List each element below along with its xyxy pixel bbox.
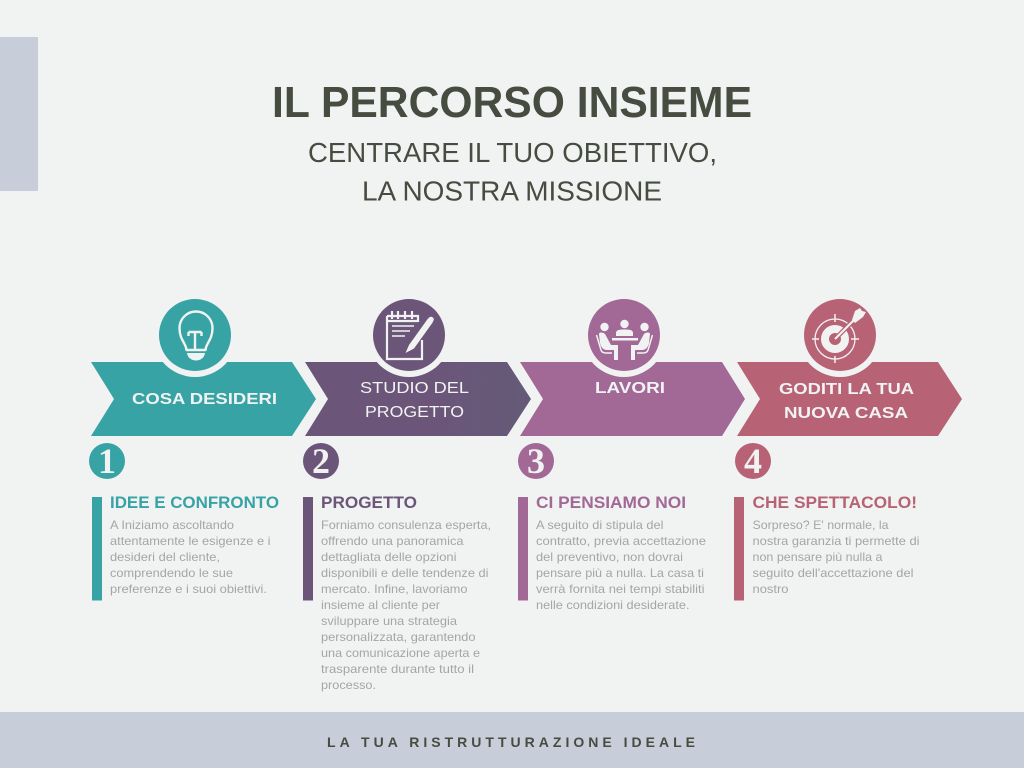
panel: ci pensiamo noi: pensare più a nulla. La casa ti (536, 566, 704, 580)
step 3 chevron: LAVORI (595, 380, 665, 397)
panel: che spettacolo (734, 494, 920, 600)
panel: progetto: una comunicazione aperta e (321, 646, 480, 660)
number badge 3 (518, 441, 554, 481)
panel: ci pensiamo noi: CI PENSIAMO NOI (536, 494, 686, 512)
step 4 chevron: NUOVA CASA (784, 405, 908, 422)
icon: notepad and pencil (367, 293, 451, 377)
icon: target with arrow (798, 293, 882, 377)
panel: ci pensiamo noi: nelle condizioni desiderate. (536, 598, 690, 612)
panel: idee e confronto: A Iniziamo ascoltando (110, 518, 234, 532)
subtitle (308, 137, 717, 206)
panel: idee e confronto: attentamente le esigenze e i (110, 534, 270, 548)
panel: progetto: PROGETTO (321, 494, 417, 512)
step 2 chevron: PROGETTO (365, 404, 464, 421)
subtitle: CENTRARE IL TUO OBIETTIVO, (308, 137, 717, 168)
panel: progetto (303, 494, 491, 692)
panel: ci pensiamo noi: del preventivo, non dovrai (536, 550, 683, 564)
step 1 chevron: COSA DESIDERI (132, 391, 277, 408)
icon: light bulb (153, 293, 237, 377)
panel: progetto: offrendo una panoramica (321, 534, 464, 548)
step 4 chevron (737, 362, 962, 436)
panel: che spettacolo: nostra garanzia ti permette di (752, 534, 920, 548)
panel: che spettacolo: CHE SPETTACOLO! (752, 494, 917, 512)
panel: progetto: processo. (321, 678, 376, 692)
number badge 4 (735, 441, 771, 481)
step 2 chevron (305, 362, 531, 436)
title: IL PERCORSO INSIEME (272, 78, 752, 127)
number badge 2 (303, 441, 339, 481)
number badge 1: 1 (98, 441, 116, 481)
panel: progetto: insieme al cliente per (321, 598, 440, 612)
decorative side block (0, 37, 38, 191)
panel: ci pensiamo noi: contratto, previa accettazione (536, 534, 706, 548)
icon: people at a table (582, 293, 666, 377)
footer band: LA TUA RISTRUTTURAZIONE IDEALE (327, 734, 695, 750)
panel: idee e confronto: IDEE E CONFRONTO (110, 494, 279, 512)
step 3 chevron (520, 362, 745, 436)
panel: ci pensiamo noi (518, 494, 706, 612)
panel: che spettacolo: seguito dell'accettazione del (752, 566, 914, 580)
panel: progetto: mercato. Infine, lavoriamo (321, 582, 468, 596)
number badge 2: 2 (312, 441, 330, 481)
panel: ci pensiamo noi: verrà fornita nei tempi stabiliti (536, 582, 704, 596)
number badge 3: 3 (527, 441, 545, 481)
panel: che spettacolo: nostro (752, 582, 789, 596)
panel: progetto: disponibili e delle tendenze di (321, 566, 488, 580)
panel: progetto: personalizzata, garantendo (321, 630, 476, 644)
panel: che spettacolo: non pensare più nulla a (752, 550, 883, 564)
step 1 chevron (91, 362, 316, 436)
panel: ci pensiamo noi: A seguito di stipula del (536, 518, 664, 532)
panel: progetto: dettagliata delle opzioni (321, 550, 456, 564)
step 4 chevron: GODITI LA TUA (779, 381, 914, 398)
panel: idee e confronto: preferenze e i suoi obiettivi. (110, 582, 267, 596)
number badge 1 (89, 441, 125, 481)
footer band (0, 712, 1024, 768)
subtitle: LA NOSTRA MISSIONE (362, 176, 662, 206)
panel: progetto: trasparente durante tutto il (321, 662, 474, 676)
panel: progetto: Forniamo consulenza esperta, (321, 518, 491, 532)
panel: progetto: sviluppare una strategia (321, 614, 457, 628)
panel: idee e confronto: desideri del cliente, (110, 550, 220, 564)
step 2 chevron: STUDIO DEL (360, 380, 469, 397)
number badge 4: 4 (744, 441, 762, 481)
panel: idee e confronto: comprendendo le sue (110, 566, 233, 580)
panel: che spettacolo: Sorpreso? E' normale, la (752, 518, 889, 532)
panel: idee e confronto (92, 494, 279, 600)
